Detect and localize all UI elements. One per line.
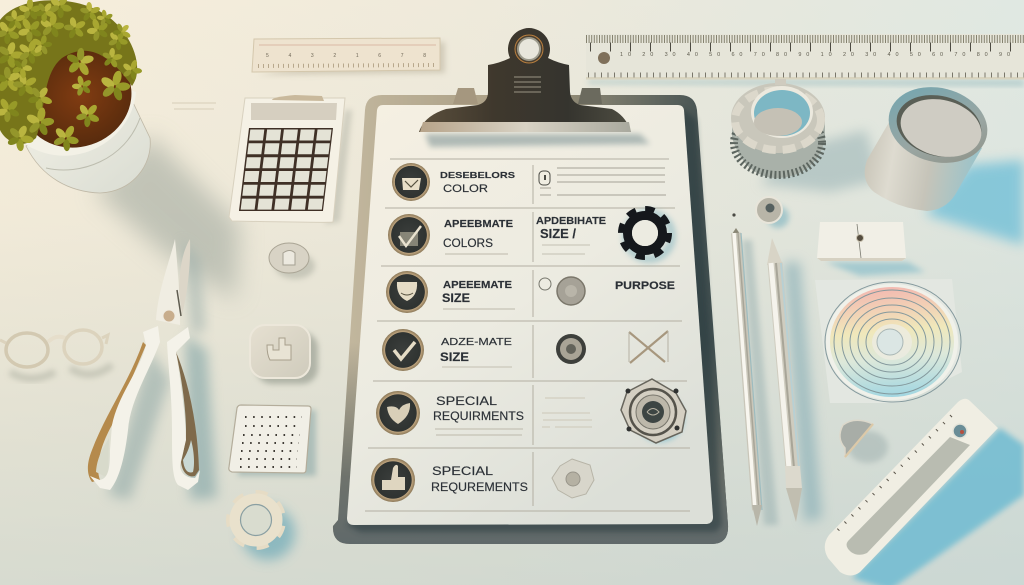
angled ruler	[825, 399, 998, 576]
paper	[347, 105, 713, 525]
row 6	[371, 458, 594, 502]
round badge	[269, 243, 315, 279]
icon: black gear	[622, 210, 672, 259]
dotted grid card	[229, 405, 316, 476]
label: DESEBELORS	[440, 170, 515, 180]
label: COLOR	[443, 183, 488, 195]
pen 2	[767, 238, 802, 522]
glasses	[0, 330, 112, 378]
label	[442, 280, 515, 309]
blades	[156, 239, 180, 325]
metal cylinder	[865, 77, 995, 211]
board	[333, 95, 728, 544]
calculator clip	[272, 95, 324, 101]
icon: dial and knob	[539, 277, 585, 305]
clip shadow	[425, 134, 650, 147]
eraser block	[817, 222, 906, 261]
small ruler top	[252, 38, 445, 75]
plant in white pot	[0, 0, 150, 193]
metal clip	[419, 28, 631, 132]
label: SPECIAL	[432, 464, 493, 478]
label: size: SIZE /	[540, 226, 576, 241]
colour wheel sticker	[815, 279, 962, 403]
label: SIZE	[440, 352, 469, 364]
row 4	[382, 329, 668, 371]
label: APEEBMATE	[444, 219, 513, 230]
label	[440, 337, 512, 367]
long ruler	[586, 34, 1024, 80]
icon: pocket badge	[386, 271, 428, 313]
row 2	[388, 210, 672, 259]
D-shaped clip	[840, 420, 888, 463]
right handle	[176, 352, 199, 476]
row 3	[386, 271, 675, 313]
pot	[26, 92, 150, 193]
icon: crossed tools	[629, 331, 668, 363]
icon: thumbs up badge	[371, 458, 415, 502]
label: SPECIAL	[436, 394, 497, 408]
clip mounts	[453, 88, 602, 104]
label: REQUIRMENTS	[433, 409, 524, 423]
label: APEEEMATE	[443, 280, 512, 291]
label: SIZE	[442, 293, 470, 305]
label	[440, 170, 515, 195]
pivot	[163, 310, 175, 322]
row 1	[392, 163, 666, 201]
icon: round dial	[556, 334, 586, 364]
scissors	[88, 239, 200, 490]
icon: faceted stone	[552, 459, 594, 498]
row 5	[376, 379, 686, 443]
paper shadow	[347, 108, 722, 532]
label	[431, 464, 528, 494]
small washer	[756, 197, 789, 228]
long ruler: 10 20 30 40 50 60 70 80 90 10 20 30 40 50 60 70 80 90	[620, 52, 1010, 58]
foliage	[0, 0, 146, 156]
soil	[7, 32, 145, 162]
detail lines	[542, 398, 592, 427]
table lines	[365, 159, 690, 511]
label: ADZE-MATE	[441, 337, 512, 348]
calculator	[229, 95, 345, 222]
label: size: APDEBIHATE	[536, 216, 606, 227]
detail lines	[539, 168, 666, 195]
label	[433, 394, 524, 435]
faint marks on the desk	[172, 103, 216, 109]
metal gear on desk	[226, 490, 295, 560]
icon: leaf badge	[376, 391, 420, 435]
icon: octagonal seal	[621, 379, 686, 443]
label	[443, 219, 513, 254]
cast shadows on the desk	[95, 80, 1024, 585]
label: COLORS	[443, 238, 493, 250]
icon: check badge	[382, 329, 424, 371]
label: REQUREMENTS	[431, 480, 528, 494]
pen 1	[732, 213, 762, 526]
icon: check box badge	[392, 163, 430, 201]
left handle	[88, 342, 146, 482]
gear ring	[731, 79, 825, 178]
small ruler top: 5 4 3 2 1 6 7 8	[266, 53, 426, 59]
label: size	[536, 216, 606, 254]
calculator keypad	[239, 128, 333, 211]
clipboard	[333, 28, 728, 544]
label: purpose: PURPOSE	[615, 280, 675, 292]
calculator display	[251, 103, 337, 120]
icon: check badge	[388, 214, 430, 256]
square token	[250, 325, 318, 384]
